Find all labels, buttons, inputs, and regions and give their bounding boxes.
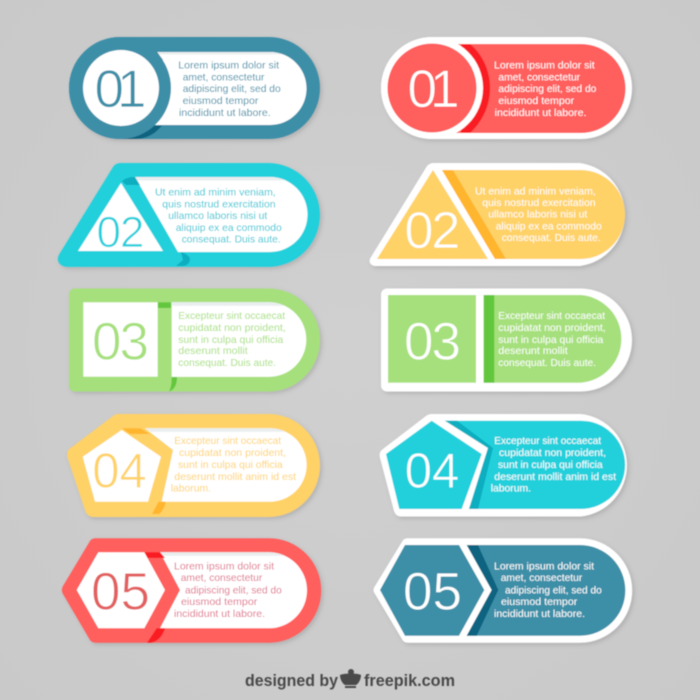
- panel: 04 yellow outline: [67, 414, 322, 519]
- number 03: 03: [92, 312, 147, 371]
- text block 01: eiusmod tempor: [183, 95, 259, 107]
- text block 05: amet, consectetur: [181, 572, 263, 584]
- footer credit: freepik.com: [364, 671, 455, 690]
- text block 01: amet, consectetur: [498, 71, 581, 83]
- number 04: 04: [405, 444, 459, 498]
- text block 02: consequat. Duis aute.: [502, 232, 601, 244]
- text block 04: cupidatat non proident,: [179, 447, 286, 459]
- text block 02: Ut enim ad minim veniam,: [155, 186, 276, 198]
- text block 04: deserunt mollit anim id est: [174, 471, 296, 483]
- text block 05: [494, 560, 602, 620]
- text block 04: [491, 435, 616, 494]
- text block 05: eiusmod tempor: [181, 596, 258, 608]
- number 02: 02: [96, 208, 143, 257]
- text block 01: adipiscing elit, sed do: [498, 83, 597, 95]
- panel: 03 green outline: [69, 288, 322, 394]
- text block 05: Lorem ipsum dolor sit: [494, 560, 594, 572]
- text block 05: adipiscing elit, sed do: [185, 584, 282, 596]
- text block 04: deserunt mollit anim id est: [494, 471, 616, 483]
- text block 04: Excepteur sint occaecat: [174, 435, 281, 447]
- text block 03: cupidatat non proident,: [178, 322, 286, 334]
- text block 03: sunt in culpa qui officia: [178, 334, 283, 346]
- panel: 01 red filled: [381, 37, 634, 141]
- text block 03: deserunt mollit: [178, 345, 248, 357]
- panel: 05 red outline: [62, 538, 323, 645]
- text block 05: eiusmod tempor: [501, 596, 578, 608]
- text block 05: incididunt ut labore.: [174, 608, 265, 620]
- text block 03: [178, 310, 286, 369]
- text block 04: [171, 435, 296, 494]
- text block 01: incididunt ut labore.: [179, 107, 271, 119]
- text block 04: sunt in culpa qui officia: [498, 459, 603, 471]
- text block 02: [475, 185, 602, 244]
- text block 05: [174, 560, 282, 620]
- text block 02: ullamco laboris nisi ut: [488, 208, 587, 220]
- text block 01: incididunt ut labore.: [495, 107, 586, 119]
- text block 05: adipiscing elit, sed do: [505, 584, 602, 596]
- text block 05: Lorem ipsum dolor sit: [174, 560, 274, 572]
- text block 02: [155, 186, 282, 246]
- text block 03: [498, 310, 606, 369]
- text block 01: adipiscing elit, sed do: [183, 83, 281, 95]
- panel: 02 yellow filled: [370, 163, 627, 268]
- text block 02: quis nostrud exercitation: [482, 197, 596, 209]
- number 04: 04: [92, 444, 147, 498]
- number 03: 03: [404, 312, 459, 371]
- footer credit: [245, 669, 455, 690]
- icon: freepik logo: [340, 669, 361, 688]
- text block 05: incididunt ut labore.: [494, 608, 585, 620]
- text block 04: sunt in culpa qui officia: [178, 459, 283, 471]
- panel: 04 cyan filled: [380, 414, 629, 518]
- text block 04: cupidatat non proident,: [499, 447, 606, 459]
- text block 01: [178, 60, 281, 119]
- panel: 01 teal outline: [69, 37, 322, 141]
- text block 04: laborum.: [491, 482, 531, 494]
- text block 01: eiusmod tempor: [498, 95, 575, 107]
- text block 01: Lorem ipsum dolor sit: [494, 60, 595, 72]
- panel: 05 teal filled: [374, 538, 634, 645]
- text block 02: aliquip ex ea commodo: [496, 220, 602, 232]
- text block 03: deserunt mollit: [498, 345, 568, 357]
- panel: 02 cyan outline: [58, 163, 322, 269]
- text block 03: consequat. Duis aute.: [178, 357, 276, 369]
- text block 03: Excepteur sint occaecat: [498, 310, 605, 322]
- text block 01: Lorem ipsum dolor sit: [178, 60, 279, 72]
- number 05: 05: [403, 562, 462, 621]
- text block 02: ullamco laboris nisi ut: [168, 210, 267, 222]
- text block 02: Ut enim ad minim veniam,: [475, 185, 596, 197]
- number 01: 01: [94, 60, 144, 119]
- text block 02: aliquip ex ea commodo: [176, 222, 282, 234]
- text block 03: consequat. Duis aute.: [498, 357, 596, 369]
- text block 04: Excepteur sint occaecat: [494, 435, 601, 447]
- footer credit: designed by: [245, 671, 339, 690]
- text block 02: consequat. Duis aute.: [182, 234, 281, 246]
- text block 04: laborum.: [171, 482, 211, 494]
- number 05: 05: [91, 562, 150, 621]
- panel: 03 green filled: [381, 288, 634, 394]
- text block 03: sunt in culpa qui officia: [498, 334, 603, 346]
- number 01: 01: [408, 60, 457, 119]
- text block 02: quis nostrud exercitation: [162, 198, 276, 210]
- text block 03: Excepteur sint occaecat: [178, 310, 285, 322]
- text block 05: amet, consectetur: [501, 572, 583, 584]
- text block 01: [494, 60, 597, 119]
- number 02: 02: [404, 202, 458, 260]
- text block 01: amet, consectetur: [183, 71, 265, 83]
- text block 03: cupidatat non proident,: [498, 322, 606, 334]
